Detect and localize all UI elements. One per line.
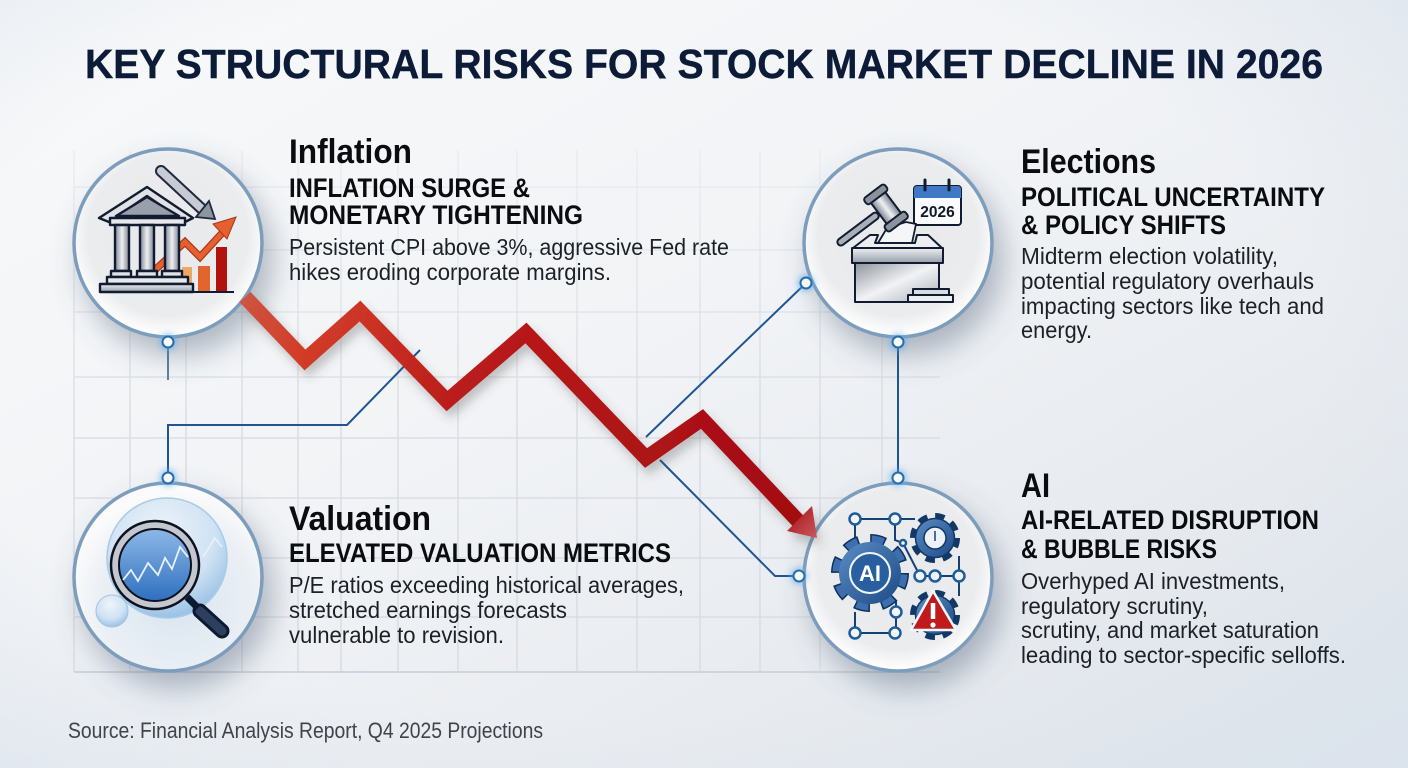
text: AI: AI-RELATED DISRUPTION (1021, 505, 1319, 535)
icon: AI gear (836, 540, 904, 606)
panel: AI icon (804, 483, 992, 671)
icon: ballot box (852, 235, 953, 302)
text: valuation: P/E ratios exceeding historical averages, (289, 572, 684, 598)
icon: calendar 2026 (914, 180, 961, 225)
text: AI: Overhyped AI investments, (1021, 568, 1285, 594)
text: AI: & BUBBLE RISKS (1021, 534, 1217, 564)
icon: magnifying glass (111, 521, 222, 631)
icon: circuit network (850, 514, 964, 638)
icon: AI gear: AI (859, 561, 881, 586)
text: elections: Midterm election volatility, (1021, 243, 1278, 269)
icon: bank building (99, 187, 193, 292)
panel: inflation icon (74, 149, 262, 337)
panel: valuation icon (74, 483, 262, 671)
node markers (160, 275, 906, 584)
text: elections: & POLICY SHIFTS (1021, 210, 1226, 240)
text: inflation: MONETARY TIGHTENING (289, 200, 583, 230)
text: AI (1021, 467, 1346, 668)
icon: large bubble (107, 498, 227, 618)
icon: falling grey arrow (161, 171, 215, 219)
icon: warning gear (911, 591, 956, 636)
text: elections: potential regulatory overhauls (1021, 268, 1314, 294)
red declining market arrow (245, 297, 817, 538)
source note: Source: Financial Analysis Report, Q4 2025 Projections (68, 718, 543, 743)
text: inflation: hikes eroding corporate margins. (289, 259, 611, 285)
connector lines (168, 283, 898, 576)
text: AI: AI (1021, 467, 1050, 505)
text: AI: leading to sector-specific selloffs. (1021, 642, 1346, 668)
text: valuation (289, 500, 684, 648)
icon: small clock gear (914, 517, 956, 559)
text: elections: impacting sectors like tech and (1021, 293, 1324, 319)
text: inflation: Inflation (289, 133, 412, 171)
icon: gavel (825, 183, 909, 261)
icon: rising orange arrow and bars (155, 217, 236, 292)
text: elections: POLITICAL UNCERTAINTY (1021, 182, 1325, 212)
icon: ballot paper (878, 222, 916, 243)
text: inflation: INFLATION SURGE & (289, 173, 530, 203)
text: AI: regulatory scrutiny, (1021, 593, 1208, 619)
text: valuation: vulnerable to revision. (289, 622, 504, 648)
text: AI: scrutiny, and market saturation (1021, 617, 1319, 643)
text: elections (1021, 143, 1325, 343)
text: inflation (289, 133, 729, 285)
icon: small bubble (96, 595, 128, 627)
text: valuation: Valuation (289, 500, 431, 538)
text: valuation: ELEVATED VALUATION METRICS (289, 538, 671, 568)
title: KEY STRUCTURAL RISKS FOR STOCK MARKET DECLINE IN 2026 (85, 41, 1323, 87)
text: inflation: Persistent CPI above 3%, aggressive Fed rate (289, 234, 729, 260)
text: elections: energy. (1021, 317, 1092, 343)
panel: elections icon (804, 149, 992, 337)
text: valuation: stretched earnings forecasts (289, 597, 567, 623)
text: elections: Elections (1021, 143, 1156, 181)
icon: calendar 2026: 2026 (920, 204, 955, 221)
